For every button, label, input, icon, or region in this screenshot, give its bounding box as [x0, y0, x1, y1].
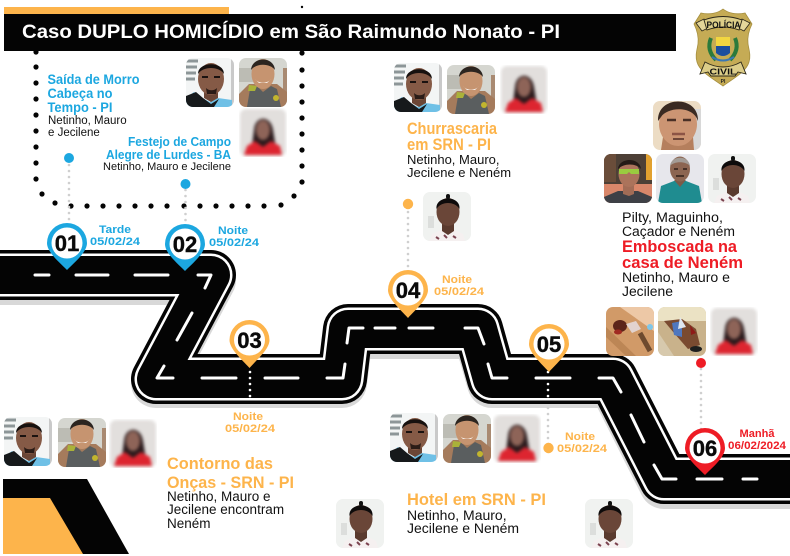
text: stop 03: Onças - SRN - PI	[167, 473, 294, 492]
text: stop 04: Jecilene e Neném	[407, 165, 511, 180]
date 05	[557, 431, 608, 455]
pin 05: 05	[537, 332, 561, 357]
date 03: Noite	[233, 411, 263, 423]
text: stop 03: Jecilene encontram	[167, 502, 284, 517]
title banner	[4, 7, 676, 51]
pin 04: 04	[396, 278, 421, 303]
date 04: 05/02/24	[434, 286, 485, 298]
dotted region outline	[33, 6, 305, 209]
pin 02: 02	[173, 232, 197, 257]
pin 04	[388, 270, 428, 318]
pin 06: 06	[693, 436, 717, 461]
police badge	[694, 9, 752, 86]
police badge: PI	[721, 79, 726, 85]
date 06: 06/02/2024	[728, 440, 787, 452]
text: stop 03	[167, 454, 294, 531]
date 01	[90, 224, 141, 248]
photos: stop 01 and 02	[186, 58, 287, 156]
date 04: Noite	[442, 274, 472, 286]
text: stop 04	[407, 120, 511, 180]
stop marker dots	[64, 153, 706, 453]
connector dots on white	[69, 165, 701, 445]
pin 03	[230, 320, 270, 368]
lane markings	[35, 275, 757, 479]
date 06: Manhã	[740, 428, 775, 440]
text: stop 05	[407, 490, 546, 536]
date 06	[728, 428, 787, 452]
photos: ambush suspects	[604, 101, 756, 203]
road surface	[0, 275, 790, 479]
text: stop 01: Cabeça no	[48, 86, 112, 101]
text: stop 02: Netinho, Mauro e Jecilene	[103, 161, 231, 173]
text: stop 03: Netinho, Mauro e	[167, 489, 271, 504]
text: stop 01	[48, 72, 140, 139]
text: stop 01: Tempo - PI	[48, 100, 112, 115]
pin 02	[165, 224, 205, 271]
date 02	[209, 225, 260, 249]
date 01: Tarde	[99, 224, 131, 236]
text: stop 05: Jecilene e Neném	[407, 520, 519, 536]
text: stop 06: Emboscada na	[622, 237, 738, 256]
text: stop 06: Pilty, Maguinho,	[622, 210, 723, 225]
pin 06	[685, 428, 725, 475]
text: stop 04: Netinho, Mauro,	[407, 152, 500, 167]
text: stop 02	[103, 134, 232, 173]
text: stop 03: Contorno das	[167, 454, 273, 473]
text: stop 02: Festejo de Campo	[128, 134, 231, 149]
date 05: 05/02/24	[557, 443, 608, 455]
photos: stop 03	[4, 417, 384, 548]
date 04	[434, 274, 485, 298]
photos: crime scene	[606, 307, 757, 356]
date 01: 05/02/24	[90, 236, 141, 248]
text: stop 01: Saída de Morro	[48, 72, 140, 87]
text: stop 04: em SRN - PI	[407, 136, 491, 154]
corner shape: black and orange	[3, 479, 129, 554]
text: stop 06: Jecilene	[622, 284, 673, 299]
date 03	[225, 411, 276, 435]
text: stop 05: Hotel em SRN - PI	[407, 490, 546, 509]
date 03: 05/02/24	[225, 423, 276, 435]
text: stop 01: e Jecilene	[48, 127, 100, 139]
date 05: Noite	[565, 431, 595, 443]
text: stop 06: casa de Neném	[622, 253, 743, 272]
text: stop 04: Churrascaria	[407, 120, 498, 138]
title banner: Caso DUPLO HOMICÍDIO em São Raimundo Nonato - PI	[22, 21, 560, 43]
police badge: CIVIL	[710, 66, 736, 76]
photos: stop 05	[390, 413, 633, 548]
text: stop 02: Alegre de Lurdes - BA	[106, 147, 232, 162]
text: stop 01: Netinho, Mauro	[48, 115, 127, 127]
text: stop 06: Netinho, Mauro e	[622, 270, 730, 285]
road shadow	[0, 280, 790, 484]
text: stop 06: Caçador e Neném	[622, 224, 735, 239]
pin 01: 01	[55, 231, 79, 256]
date 02: Noite	[218, 225, 248, 237]
text: stop 03: Neném	[167, 516, 211, 531]
police badge: POLÍCIA	[706, 20, 741, 30]
pin 05	[529, 324, 569, 372]
date 02: 05/02/24	[209, 237, 260, 249]
pin 01	[47, 223, 87, 270]
text: stop 05: Netinho, Mauro,	[407, 507, 507, 523]
text: stop 06	[622, 210, 743, 299]
road	[0, 275, 790, 484]
photos: stop 04	[394, 63, 547, 241]
pin 03: 03	[237, 328, 262, 353]
